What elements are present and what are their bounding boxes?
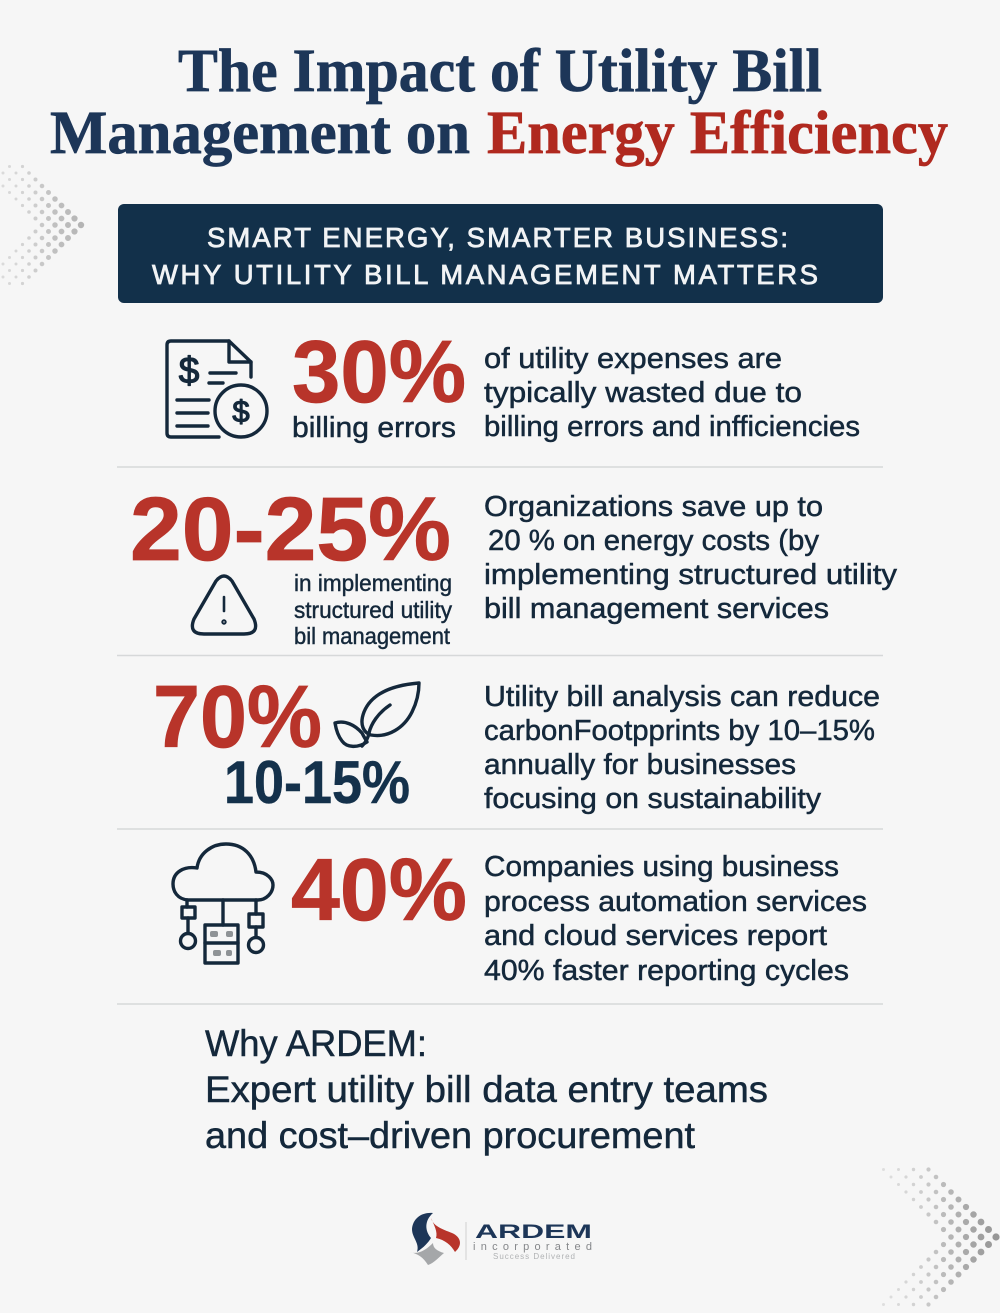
- why ARDEM text block: Expert utility bill data entry teams: [205, 1069, 768, 1110]
- banner: [118, 204, 883, 303]
- description: 40% faster reporting cycles: [484, 955, 849, 987]
- description: [484, 681, 880, 815]
- icon: warning triangle: [192, 576, 256, 634]
- why ARDEM text block: and cost–driven procurement: [205, 1115, 696, 1156]
- decorative dotted chevron: top left: [3, 166, 81, 284]
- title: Management on: [50, 100, 470, 167]
- description: bill management services: [484, 593, 829, 625]
- icon: logo mark: [410, 1213, 460, 1265]
- description: Utility bill analysis can reduce: [484, 681, 880, 713]
- stat label: in implementing: [294, 570, 452, 596]
- stat: 20-25%: 20-25%: [130, 480, 451, 580]
- description: of utility expenses are: [484, 343, 782, 375]
- description: Companies using business: [484, 851, 839, 883]
- why ARDEM text block: Why ARDEM:: [205, 1023, 427, 1064]
- description: [484, 851, 867, 987]
- stat: 10-15%: 10-15%: [224, 749, 410, 816]
- description: 20 % on energy costs (by: [488, 525, 819, 557]
- icon: leaf: [335, 683, 419, 746]
- stat: 70%: 70%: [153, 667, 322, 766]
- description: Organizations save up to: [484, 491, 823, 523]
- icon: cloud network: [173, 844, 273, 963]
- panel: billing errors stat: [167, 322, 860, 444]
- panel: cost savings stat: [130, 480, 898, 649]
- description: annually for businesses: [484, 749, 796, 781]
- stat label: structured utility: [294, 597, 452, 623]
- why ARDEM text block: [205, 1023, 768, 1156]
- description: carbonFootpprints by 10–15%: [484, 715, 875, 747]
- description: focusing on sustainability: [484, 783, 822, 815]
- description: billing errors and infficiencies: [484, 411, 860, 443]
- title: The Impact of Utility Bill: [178, 38, 822, 105]
- logo: ARDEM incorporated: ARDEM: [475, 1222, 592, 1243]
- banner: WHY UTILITY BILL MANAGEMENT MATTERS: [152, 259, 818, 290]
- stat label: billing errors: [292, 412, 456, 444]
- stat: 30%: 30%: [292, 322, 466, 421]
- title: [50, 38, 948, 167]
- logo: ARDEM incorporated: [410, 1213, 592, 1265]
- icon: bill with dollar coin: [167, 341, 267, 437]
- logo: ARDEM incorporated: incorporated: [473, 1241, 592, 1253]
- panel: faster reporting stat: [173, 840, 867, 987]
- description: [484, 343, 860, 443]
- panel: carbon footprint stat: [153, 667, 880, 816]
- banner: SMART ENERGY, SMARTER BUSINESS:: [207, 222, 788, 253]
- icon: bill with dollar coin: $: [179, 350, 199, 391]
- title: Energy Efficiency: [487, 100, 948, 167]
- description: [484, 491, 898, 625]
- icon: bill with dollar coin: $: [232, 394, 250, 429]
- description: implementing structured utility: [484, 559, 898, 591]
- stat: 40%: 40%: [291, 840, 467, 939]
- description: typically wasted due to: [484, 377, 802, 409]
- description: process automation services: [484, 886, 867, 918]
- stat label: [294, 570, 452, 649]
- stat label: bil management: [294, 623, 451, 649]
- logo: ARDEM incorporated: Success Delivered: [493, 1252, 575, 1261]
- decorative dotted chevron: bottom right: [884, 1170, 996, 1305]
- description: and cloud services report: [484, 920, 827, 952]
